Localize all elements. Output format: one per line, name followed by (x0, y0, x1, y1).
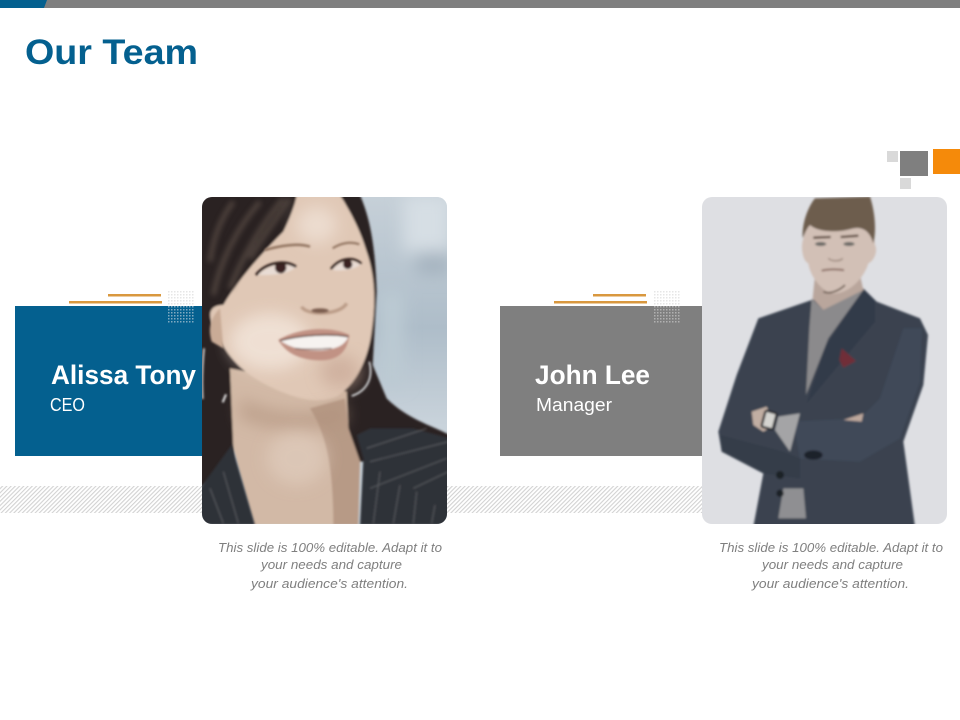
caption: John Lee: your needs and capture (761, 558, 903, 572)
caption: Alissa Tony: This slide is 100% editable. Adapt it to (218, 541, 442, 555)
jacket (200, 445, 255, 525)
face (210, 195, 374, 400)
earrings (202, 348, 204, 399)
accent lines: Alissa Tony (69, 294, 162, 304)
hair (803, 197, 875, 243)
hair (200, 195, 450, 488)
caption: John Lee: This slide is 100% editable. Adapt it to (719, 541, 943, 555)
neck (230, 368, 360, 525)
buttons (776, 471, 784, 479)
caption: Alissa Tony: your audience's attention. (250, 577, 408, 591)
caption: John Lee (719, 541, 943, 591)
mouth (278, 329, 349, 360)
accent lines: John Lee (554, 294, 647, 304)
dot pattern: John Lee (653, 290, 680, 306)
panel: Alissa Tony (15, 306, 202, 456)
face (801, 226, 877, 294)
panel: John Lee (500, 306, 702, 456)
eyes (258, 265, 295, 275)
caption: John Lee: your audience's attention. (751, 577, 909, 591)
jacket (718, 288, 928, 527)
role: CEO: CEO (50, 395, 85, 415)
decorative squares icon (887, 149, 960, 189)
title: Our Team (25, 33, 198, 72)
hatched band (0, 486, 704, 513)
nose and mouth (828, 258, 843, 261)
name: Alissa Tony: Alissa Tony (51, 360, 196, 390)
nose (302, 303, 347, 313)
dot pattern: Alissa Tony (168, 290, 195, 306)
photo: John Lee (702, 197, 947, 527)
shirt (806, 289, 864, 395)
name: John Lee: John Lee (535, 360, 650, 390)
role: Manager: Manager (536, 395, 612, 415)
photo: Alissa Tony (200, 195, 450, 525)
lapels (810, 292, 874, 397)
eyes and brows (813, 236, 858, 238)
neck (813, 275, 863, 310)
top bar (0, 0, 960, 8)
caption: Alissa Tony (218, 541, 442, 591)
skin shading (230, 313, 310, 370)
pocket square (839, 348, 856, 368)
hands and cuff (752, 407, 775, 432)
caption: Alissa Tony: your needs and capture (260, 558, 402, 572)
hair strands (210, 198, 290, 295)
